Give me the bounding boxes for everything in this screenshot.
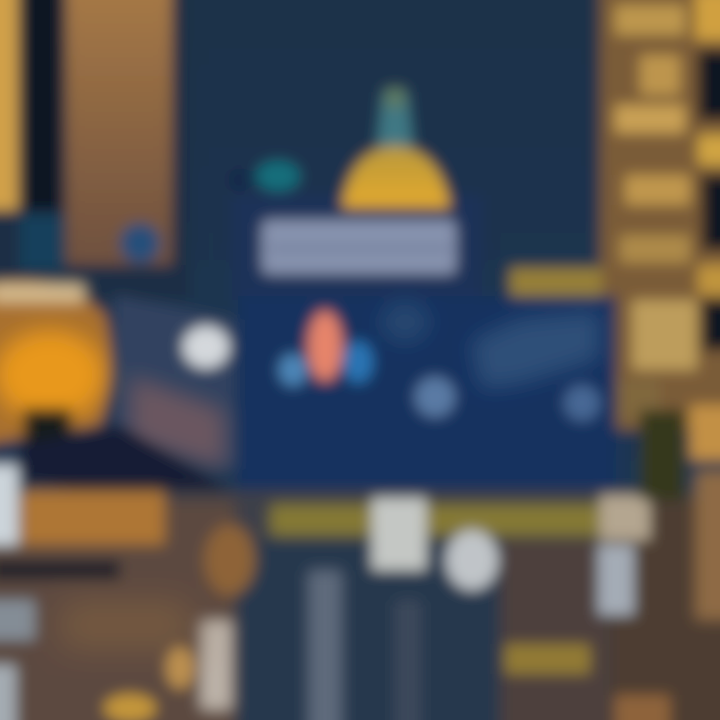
glowing storefront — [0, 281, 110, 470]
dark band across street — [20, 425, 230, 495]
right warm column — [690, 405, 720, 460]
domed building — [228, 88, 482, 300]
large blue panel — [238, 296, 616, 490]
pale facade band — [262, 220, 456, 274]
central figure icon — [279, 311, 373, 386]
left mid street building — [115, 295, 235, 470]
white lights — [372, 498, 426, 570]
street — [0, 405, 720, 720]
left warm lights — [20, 490, 165, 545]
dome — [342, 146, 450, 208]
yellow sign — [510, 268, 602, 298]
dome finial — [377, 92, 413, 147]
teal turret — [256, 161, 300, 191]
left buildings — [0, 0, 190, 300]
map-like shapes — [379, 300, 431, 344]
yellow reflection strip — [270, 504, 610, 536]
right building — [600, 0, 720, 430]
